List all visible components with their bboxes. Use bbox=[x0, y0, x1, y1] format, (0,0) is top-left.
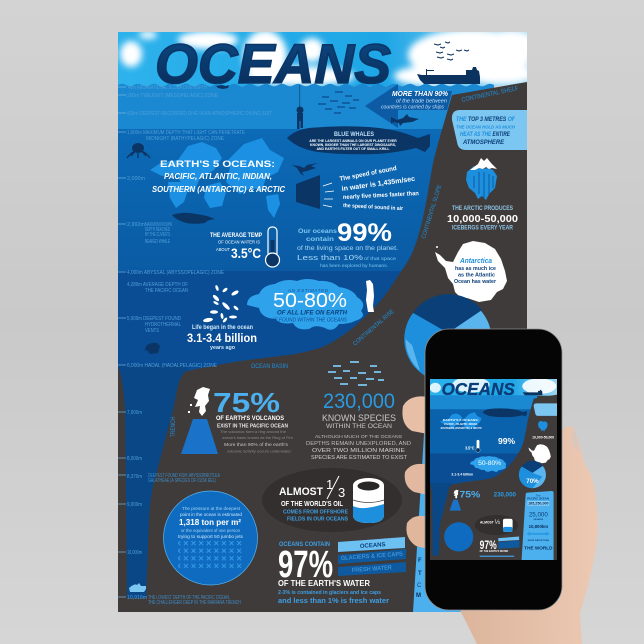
oil text: ALMOST bbox=[279, 486, 323, 498]
icon: thermometer bbox=[266, 227, 280, 267]
oil panel: 1 bbox=[326, 477, 333, 492]
icon: cuvier's whale bbox=[172, 213, 215, 224]
75 percent volcanos: More than 90% of the earth's bbox=[224, 442, 289, 447]
99 percent living space: 99% bbox=[337, 219, 392, 247]
callout: top 3 metres: HEAT AS THE ENTIRE bbox=[460, 132, 511, 138]
mini 230,000: 230,000 bbox=[494, 491, 516, 498]
depth scale labels: BY THE CUVIER'S bbox=[145, 232, 170, 238]
depth scale labels: 8,370m bbox=[127, 474, 142, 480]
hand: fingers and palm bbox=[402, 396, 598, 644]
average temperature text bbox=[210, 233, 262, 261]
oil panel: OF THE WORLD'S OIL bbox=[281, 501, 344, 508]
sound text: nearly five times faster than bbox=[343, 191, 419, 201]
75 percent volcanos: OF EARTH'S VOLCANOS bbox=[216, 415, 285, 422]
mini map and heading: SOUTHERN (ANTARCTIC) & ARCTIC bbox=[441, 426, 483, 430]
99 percent living space: contain bbox=[306, 236, 334, 243]
mini iceberg bbox=[532, 421, 554, 439]
75 percent volcanos: 75% bbox=[213, 387, 280, 418]
title: OCEANS bbox=[155, 32, 391, 95]
blue whale: ARE THE LARGEST ANIMALS ON OUR PLANET EVER bbox=[309, 139, 397, 143]
antarctica text: Antarctica bbox=[459, 258, 492, 265]
mini stats panel: 25,000 bbox=[529, 512, 548, 519]
mini oil bbox=[475, 515, 518, 535]
depth scale labels bbox=[127, 85, 272, 606]
230,000 known species: DEPTHS REMAIN UNEXPLORED, AND bbox=[306, 441, 411, 447]
depth scale labels: 2,992m bbox=[127, 222, 145, 228]
world map bbox=[150, 138, 284, 218]
shipping text bbox=[381, 89, 448, 110]
pie chart bbox=[404, 294, 492, 382]
75 percent volcanos: The volcanos form a ring around the bbox=[220, 429, 287, 434]
icon: octopus bbox=[127, 143, 150, 158]
mini sky bbox=[430, 379, 557, 396]
mini stats panel: 165,250,000 bbox=[528, 502, 549, 506]
mini pie: 70% bbox=[526, 478, 539, 485]
right stats panel: M bbox=[416, 593, 421, 599]
depth scale labels: 10,000m bbox=[127, 550, 142, 556]
volcano bbox=[181, 387, 218, 454]
75 percent volcanos: ocean's basin known as the Ring of Fire bbox=[222, 435, 294, 440]
mini title: OCEANS bbox=[441, 379, 515, 399]
iceberg statistic text: THE ARCTIC PRODUCES bbox=[452, 205, 514, 212]
continental shelf label: CONTINENTAL SHELF bbox=[461, 85, 519, 104]
230,000 known species: WITHIN THE OCEAN bbox=[326, 423, 392, 430]
mini 97 percent: OF THE EARTH'S WATER bbox=[480, 550, 508, 553]
230,000 known species bbox=[306, 390, 411, 461]
99 percent living space: of that space bbox=[364, 256, 397, 261]
icon: diving suit bbox=[296, 85, 304, 129]
ocean basin label: OCEAN BASIN bbox=[251, 364, 288, 370]
fish school bbox=[318, 92, 359, 113]
pressure circle: 1,318 ton per m² bbox=[179, 518, 241, 527]
antarctica: Ocean has water bbox=[454, 279, 497, 285]
shipping arrow bbox=[365, 84, 452, 128]
mini map and heading: PACIFIC, ATLANTIC, INDIAN, bbox=[444, 422, 478, 426]
icon: oil barrel bbox=[353, 478, 384, 523]
iceberg statistic text: 10,000-50,000 bbox=[447, 213, 518, 225]
depth scale labels: 2,000m bbox=[127, 176, 145, 182]
mini cloud: 50-80% bbox=[478, 460, 502, 467]
callout: top 3 metres: ATMOSPHERE bbox=[462, 140, 505, 146]
pie chart: 70% bbox=[437, 349, 469, 366]
average temperature text: THE AVERAGE TEMP bbox=[210, 233, 262, 239]
depth scale labels: THE PACIFIC OCEAN bbox=[145, 288, 188, 294]
right stats panel: F bbox=[418, 558, 422, 564]
depth scale labels: 6,000m HADAL (HADALPELAGIC) ZONE bbox=[127, 363, 218, 369]
mini 97 percent bbox=[480, 537, 519, 557]
pressure circle: trying to support 50 jumbo jets bbox=[178, 534, 243, 539]
depth scale labels: 40m RECREATIONAL SCUBA DIVE DEPTH bbox=[128, 85, 207, 91]
mini stats panel: THE WORLD bbox=[524, 545, 553, 550]
97 percent water: and less than 1% is fresh water bbox=[278, 596, 389, 605]
icon: submersible bbox=[129, 583, 146, 592]
mini iceberg: 10,000-50,000 bbox=[532, 435, 554, 439]
cloud callout: IS FOUND WITHIN THE OCEANS bbox=[273, 318, 348, 324]
antarctica: has as much ice bbox=[455, 266, 496, 272]
mini ocean bbox=[430, 395, 557, 560]
depth scale labels: VENTS bbox=[145, 328, 160, 334]
icon: white figure bbox=[366, 280, 374, 312]
depth scale labels: HYDROTHERMAL bbox=[145, 322, 181, 328]
depth scale labels: THE CHALLENGER DEEP IN THE MARIANA TRENCH bbox=[148, 600, 241, 606]
heading: earth's 5 oceans bbox=[152, 159, 286, 194]
depth scale labels: 4,280m AVERAGE DEPTH OF bbox=[127, 282, 188, 288]
depth scale labels: DEPTH REACHED bbox=[145, 227, 170, 233]
mini map and heading bbox=[440, 412, 483, 430]
phone bbox=[425, 329, 562, 610]
icon: squid bbox=[292, 163, 318, 176]
mini map and heading: EARTH'S 5 OCEANS: bbox=[443, 418, 479, 422]
97 percent water: 97% bbox=[278, 544, 333, 586]
shipping text: countries is carried by ships bbox=[381, 104, 444, 110]
heading: earth's 5 oceans: EARTH'S 5 OCEANS: bbox=[160, 159, 275, 170]
right stats panel: T bbox=[418, 571, 422, 577]
depth scale labels: 600m DEEPEST RECORDED DIVE IN AN ATMOSPHERIC DIVING SUIT bbox=[127, 111, 272, 117]
oil panel: FIELDS IN OUR OCEANS bbox=[287, 516, 348, 522]
97 percent water bbox=[278, 542, 389, 605]
trench label: TRENCH bbox=[171, 417, 177, 437]
shipping text: MORE THAN 90% bbox=[392, 89, 448, 98]
mini stats panel: ISLANDS bbox=[534, 518, 544, 521]
icon: anglerfish bbox=[145, 343, 160, 354]
life began text: 3.1-3.4 billion bbox=[187, 331, 257, 345]
blue whale bbox=[287, 126, 430, 154]
oil panel: 3 bbox=[338, 485, 345, 500]
pressure circle: point in the ocean is estimated bbox=[180, 512, 243, 517]
sound text: the speed of sound in air bbox=[343, 203, 404, 212]
phone screen miniature poster bbox=[430, 377, 557, 560]
mini stats panel: MORE WATER THAN bbox=[528, 539, 549, 542]
99 percent living space bbox=[297, 219, 398, 268]
99 percent living space: Less than 10% bbox=[297, 255, 363, 262]
99 percent living space: has been explored by humans. bbox=[320, 263, 388, 268]
average temperature text: ABOUT bbox=[216, 247, 230, 252]
continental slope label: CONTINENTAL SLOPE bbox=[421, 184, 443, 240]
mini pressure circle bbox=[444, 522, 473, 552]
average temperature text: OF OCEAN WATER IS bbox=[218, 240, 260, 244]
icon: birds bbox=[434, 42, 469, 60]
mini 97 percent: 97% bbox=[480, 538, 497, 552]
blue whale: AND EARTH'S FILTER OUT OF SMALL KRILL bbox=[317, 147, 389, 151]
230,000 known species: ALTHOUGH MUCH OF THE OCEANS bbox=[315, 434, 402, 439]
99 percent living space: of the living space on the planet. bbox=[297, 246, 398, 252]
pressure circle bbox=[164, 491, 258, 585]
mini antarctica bbox=[528, 444, 551, 463]
sound text: in water is 1,435m/sec bbox=[341, 176, 416, 193]
mini 99 percent: 99% bbox=[498, 437, 515, 446]
97 percent water: 2-3% is contained in glaciers and ice caps bbox=[278, 590, 381, 596]
depth scale labels: DEEPEST FOUND FISH: ABYSSOBROTULA bbox=[148, 473, 220, 479]
mini ship bbox=[523, 390, 542, 395]
mini stats panel: PACIFIC OCEAN bbox=[527, 496, 549, 500]
water composition bars: GLACIERS & ICE CAPS bbox=[341, 552, 403, 562]
life began text: Life began in the ocean bbox=[192, 325, 253, 331]
230,000 known species: SPECIES ARE ESTIMATED TO EXIST bbox=[311, 455, 407, 461]
depth scale labels: 1,000m MAXIMUM DEPTH THAT LIGHT CAN PENETRATE bbox=[127, 130, 246, 136]
mini thermometer bbox=[465, 440, 480, 452]
average temperature text: 3.5°C bbox=[231, 245, 261, 261]
97 percent water: OF THE EARTH'S WATER bbox=[278, 579, 370, 588]
depth scale labels: 4,000m ABYSSAL (ABYSSOPELAGIC) ZONE bbox=[127, 270, 225, 276]
blue whale: KNOWN, BIGGER THAN THE LARGEST DINOSAURS, bbox=[310, 143, 396, 147]
depth scale labels: 5,000m DEEPEST FOUND bbox=[127, 316, 181, 322]
75 percent volcanos bbox=[213, 387, 294, 454]
speed of sound section bbox=[296, 165, 419, 212]
icon: ship bbox=[417, 67, 480, 84]
mini pie bbox=[519, 461, 546, 488]
99 percent living space: Our oceans bbox=[298, 228, 337, 235]
230,000 known species: 230,000 bbox=[323, 390, 395, 413]
blue whale text: BLUE WHALES bbox=[334, 131, 375, 138]
oil panel: COMES FROM OFFSHORE bbox=[283, 510, 348, 516]
230,000 known species: OVER TWO MILLION MARINE bbox=[312, 448, 405, 454]
iceberg statistic text bbox=[447, 205, 518, 232]
callout: top 3 metres bbox=[452, 110, 527, 150]
mini life text: 3.1-3.4 billion bbox=[451, 473, 474, 477]
mini oil: ALMOST bbox=[480, 520, 495, 524]
right stats panel: C bbox=[417, 583, 422, 589]
depth scale labels: BEAKED WHALE bbox=[145, 239, 170, 245]
depth scale labels: 7,000m bbox=[127, 410, 142, 416]
75 percent volcanos: volcanic activity occurs underwater bbox=[227, 448, 292, 454]
water composition bars: FRESH WATER bbox=[352, 565, 393, 574]
life began text bbox=[187, 325, 257, 351]
fish school: known species bbox=[328, 362, 384, 385]
mini volcano and 75 percent bbox=[450, 490, 481, 511]
mini oil: ⅓ bbox=[495, 519, 501, 526]
cloud text: AN ESTIMATED bbox=[287, 288, 329, 293]
depth scale labels: 200m TWILIGHT (MESOPELAGIC) ZONE bbox=[127, 93, 219, 99]
depth scale labels: THE LOWEST DEPTH OF THE PACIFIC OCEAN, bbox=[148, 595, 230, 601]
water composition bars bbox=[338, 537, 406, 576]
shipping text: of the trade between bbox=[396, 98, 447, 104]
mini whale bbox=[482, 408, 527, 417]
75 percent volcanos: EXIST IN THE PACIFIC OCEAN bbox=[217, 424, 288, 430]
icon: shark bbox=[391, 114, 419, 126]
cloud callout: OF ALL LIFE ON EARTH bbox=[277, 310, 348, 316]
cloud callout bbox=[247, 279, 363, 330]
oil panel bbox=[262, 468, 402, 532]
sound text: The speed of sound bbox=[339, 165, 397, 183]
depth scale labels: 8,000m bbox=[127, 456, 142, 462]
depth scale labels: MAXIMUM KNOWN bbox=[145, 222, 172, 228]
icon: scuba diver bbox=[216, 85, 229, 89]
depth scale labels: 10,916m bbox=[127, 595, 147, 601]
mini stats panel bbox=[522, 491, 554, 560]
97 percent water: OCEANS CONTAIN bbox=[279, 542, 330, 548]
right stats panel bbox=[413, 391, 516, 612]
pressure circle: or the equivalent of one person bbox=[181, 528, 241, 533]
water composition bars: OCEANS bbox=[360, 542, 386, 550]
sky with clouds bbox=[118, 29, 536, 86]
continental seabed bbox=[118, 82, 527, 612]
depth scale ticks bbox=[118, 87, 126, 597]
mini cloud bbox=[470, 456, 506, 472]
antarctica: as the Atlantic bbox=[458, 272, 495, 278]
icon: megaphone bbox=[296, 175, 320, 209]
depth scale labels: GALATHEAE (A SPECIES OF CUSK EEL) bbox=[148, 478, 216, 484]
mini stats panel: 10,800km bbox=[529, 524, 548, 529]
life began text: years ago bbox=[210, 345, 236, 351]
mini thermometer: 3.5°C bbox=[465, 446, 475, 451]
depth scale labels: 9,000m bbox=[127, 502, 142, 508]
230,000 known species: KNOWN SPECIES bbox=[322, 413, 396, 423]
ocean water zones bbox=[118, 84, 494, 605]
icon: bacteria bbox=[203, 285, 239, 323]
callout: top 3 metres: THE TOP 3 METRES OF bbox=[456, 117, 515, 123]
heading: earth's 5 oceans: SOUTHERN (ANTARCTIC) & ARCTIC bbox=[152, 184, 286, 194]
sound text bbox=[339, 165, 419, 212]
antarctica bbox=[435, 241, 507, 302]
icon: iceberg bbox=[466, 158, 497, 200]
mini stats panel: The bbox=[536, 493, 541, 497]
cloud callout: 50-80% bbox=[273, 290, 347, 312]
depth scale labels: MIDNIGHT (BATHYPELAGIC) ZONE bbox=[146, 136, 225, 142]
pressure circle: The pressure at the deepest bbox=[182, 506, 241, 511]
iceberg statistic text: ICEBERGS EVERY YEAR bbox=[452, 224, 513, 232]
poster bbox=[118, 29, 536, 612]
heading: earth's 5 oceans: PACIFIC, ATLANTIC, INDIAN, bbox=[164, 171, 272, 181]
continental rise label: CONTINENTAL RISE bbox=[352, 309, 396, 348]
callout: top 3 metres: THE OCEAN HOLD AS MUCH bbox=[456, 124, 515, 130]
mini volcano and 75 percent: 75% bbox=[459, 490, 481, 500]
mini callout box bbox=[534, 403, 557, 416]
